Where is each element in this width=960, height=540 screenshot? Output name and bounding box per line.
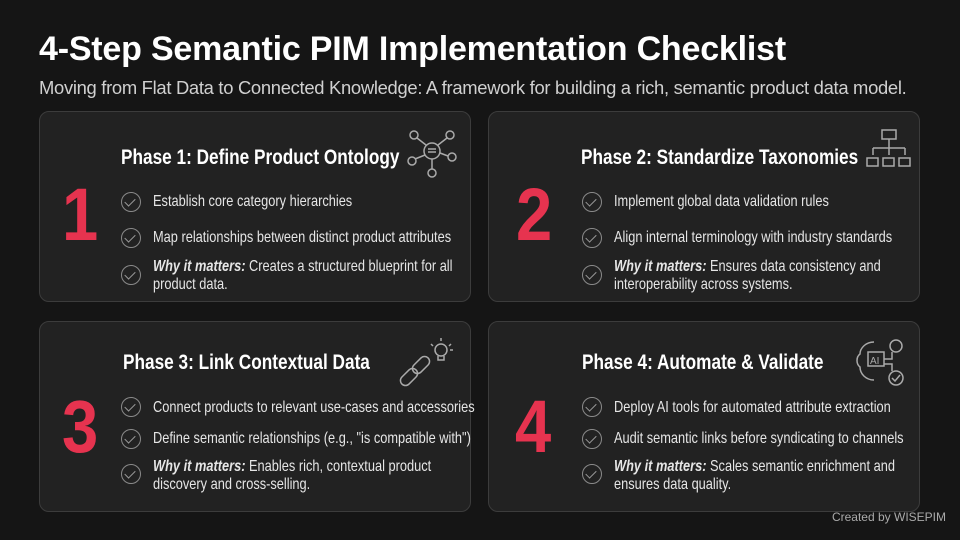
number 2: 2 bbox=[516, 173, 552, 256]
heading 2: Phase 2: Standardize Taxonomies bbox=[581, 146, 858, 169]
icon: hierarchy bbox=[866, 129, 911, 167]
number 3: 3 bbox=[62, 385, 98, 468]
panel: phase 3 bbox=[39, 321, 471, 512]
items 2 bbox=[582, 192, 602, 212]
heading 1: Phase 1: Define Product Ontology bbox=[121, 146, 399, 169]
number 1: 1 bbox=[62, 173, 98, 256]
panel: phase 1 bbox=[39, 111, 471, 302]
title: 4-Step Semantic PIM Implementation Checklist bbox=[39, 30, 786, 68]
panel: phase 3: Why it matters: Enables rich, contextual product bbox=[153, 458, 431, 475]
subtitle: Moving from Flat Data to Connected Knowledge: A framework for building a rich, semantic product data model. bbox=[39, 77, 906, 98]
items 4 bbox=[582, 397, 602, 417]
panel: phase 4: ensures data quality. bbox=[614, 476, 731, 493]
heading 4: Phase 4: Automate & Validate bbox=[582, 351, 823, 374]
panel: phase 1: Establish core category hierarchies bbox=[153, 193, 352, 210]
panel: phase 2 bbox=[488, 111, 920, 302]
icon: network bbox=[407, 130, 457, 178]
icon: AI brain: AI bbox=[870, 356, 879, 367]
panel: phase 4: Deploy AI tools for automated attribute extraction bbox=[614, 399, 891, 416]
panel: phase 4: Why it matters: Scales semantic enrichment and bbox=[614, 458, 895, 475]
number 4: 4 bbox=[515, 385, 551, 468]
panel: phase 1: Why it matters: Creates a structured blueprint for all bbox=[153, 258, 452, 275]
panel: phase 3: Define semantic relationships (e.g., "is compatible with") bbox=[153, 430, 471, 447]
panel: phase 4 bbox=[488, 321, 920, 512]
icon: chain and bulb bbox=[400, 338, 453, 386]
panel: phase 2: Align internal terminology with industry standards bbox=[614, 229, 892, 246]
icon: AI brain bbox=[856, 339, 904, 386]
heading 3: Phase 3: Link Contextual Data bbox=[123, 351, 370, 374]
footer credit: Created by WISEPIM bbox=[832, 510, 946, 524]
items 3 bbox=[121, 397, 141, 417]
panel: phase 1: product data. bbox=[153, 276, 228, 293]
panel: phase 2: Implement global data validation rules bbox=[614, 193, 829, 210]
panel: phase 4: Audit semantic links before syndicating to channels bbox=[614, 430, 904, 447]
panel: phase 2: Why it matters: Ensures data consistency and bbox=[614, 258, 881, 275]
panel: phase 3: Connect products to relevant use-cases and accessories bbox=[153, 399, 475, 416]
panel: phase 1: Map relationships between distinct product attributes bbox=[153, 229, 451, 246]
panel: phase 2: interoperability across systems. bbox=[614, 276, 793, 293]
panel: phase 3: discovery and cross-selling. bbox=[153, 476, 310, 493]
items 1 bbox=[121, 192, 141, 212]
